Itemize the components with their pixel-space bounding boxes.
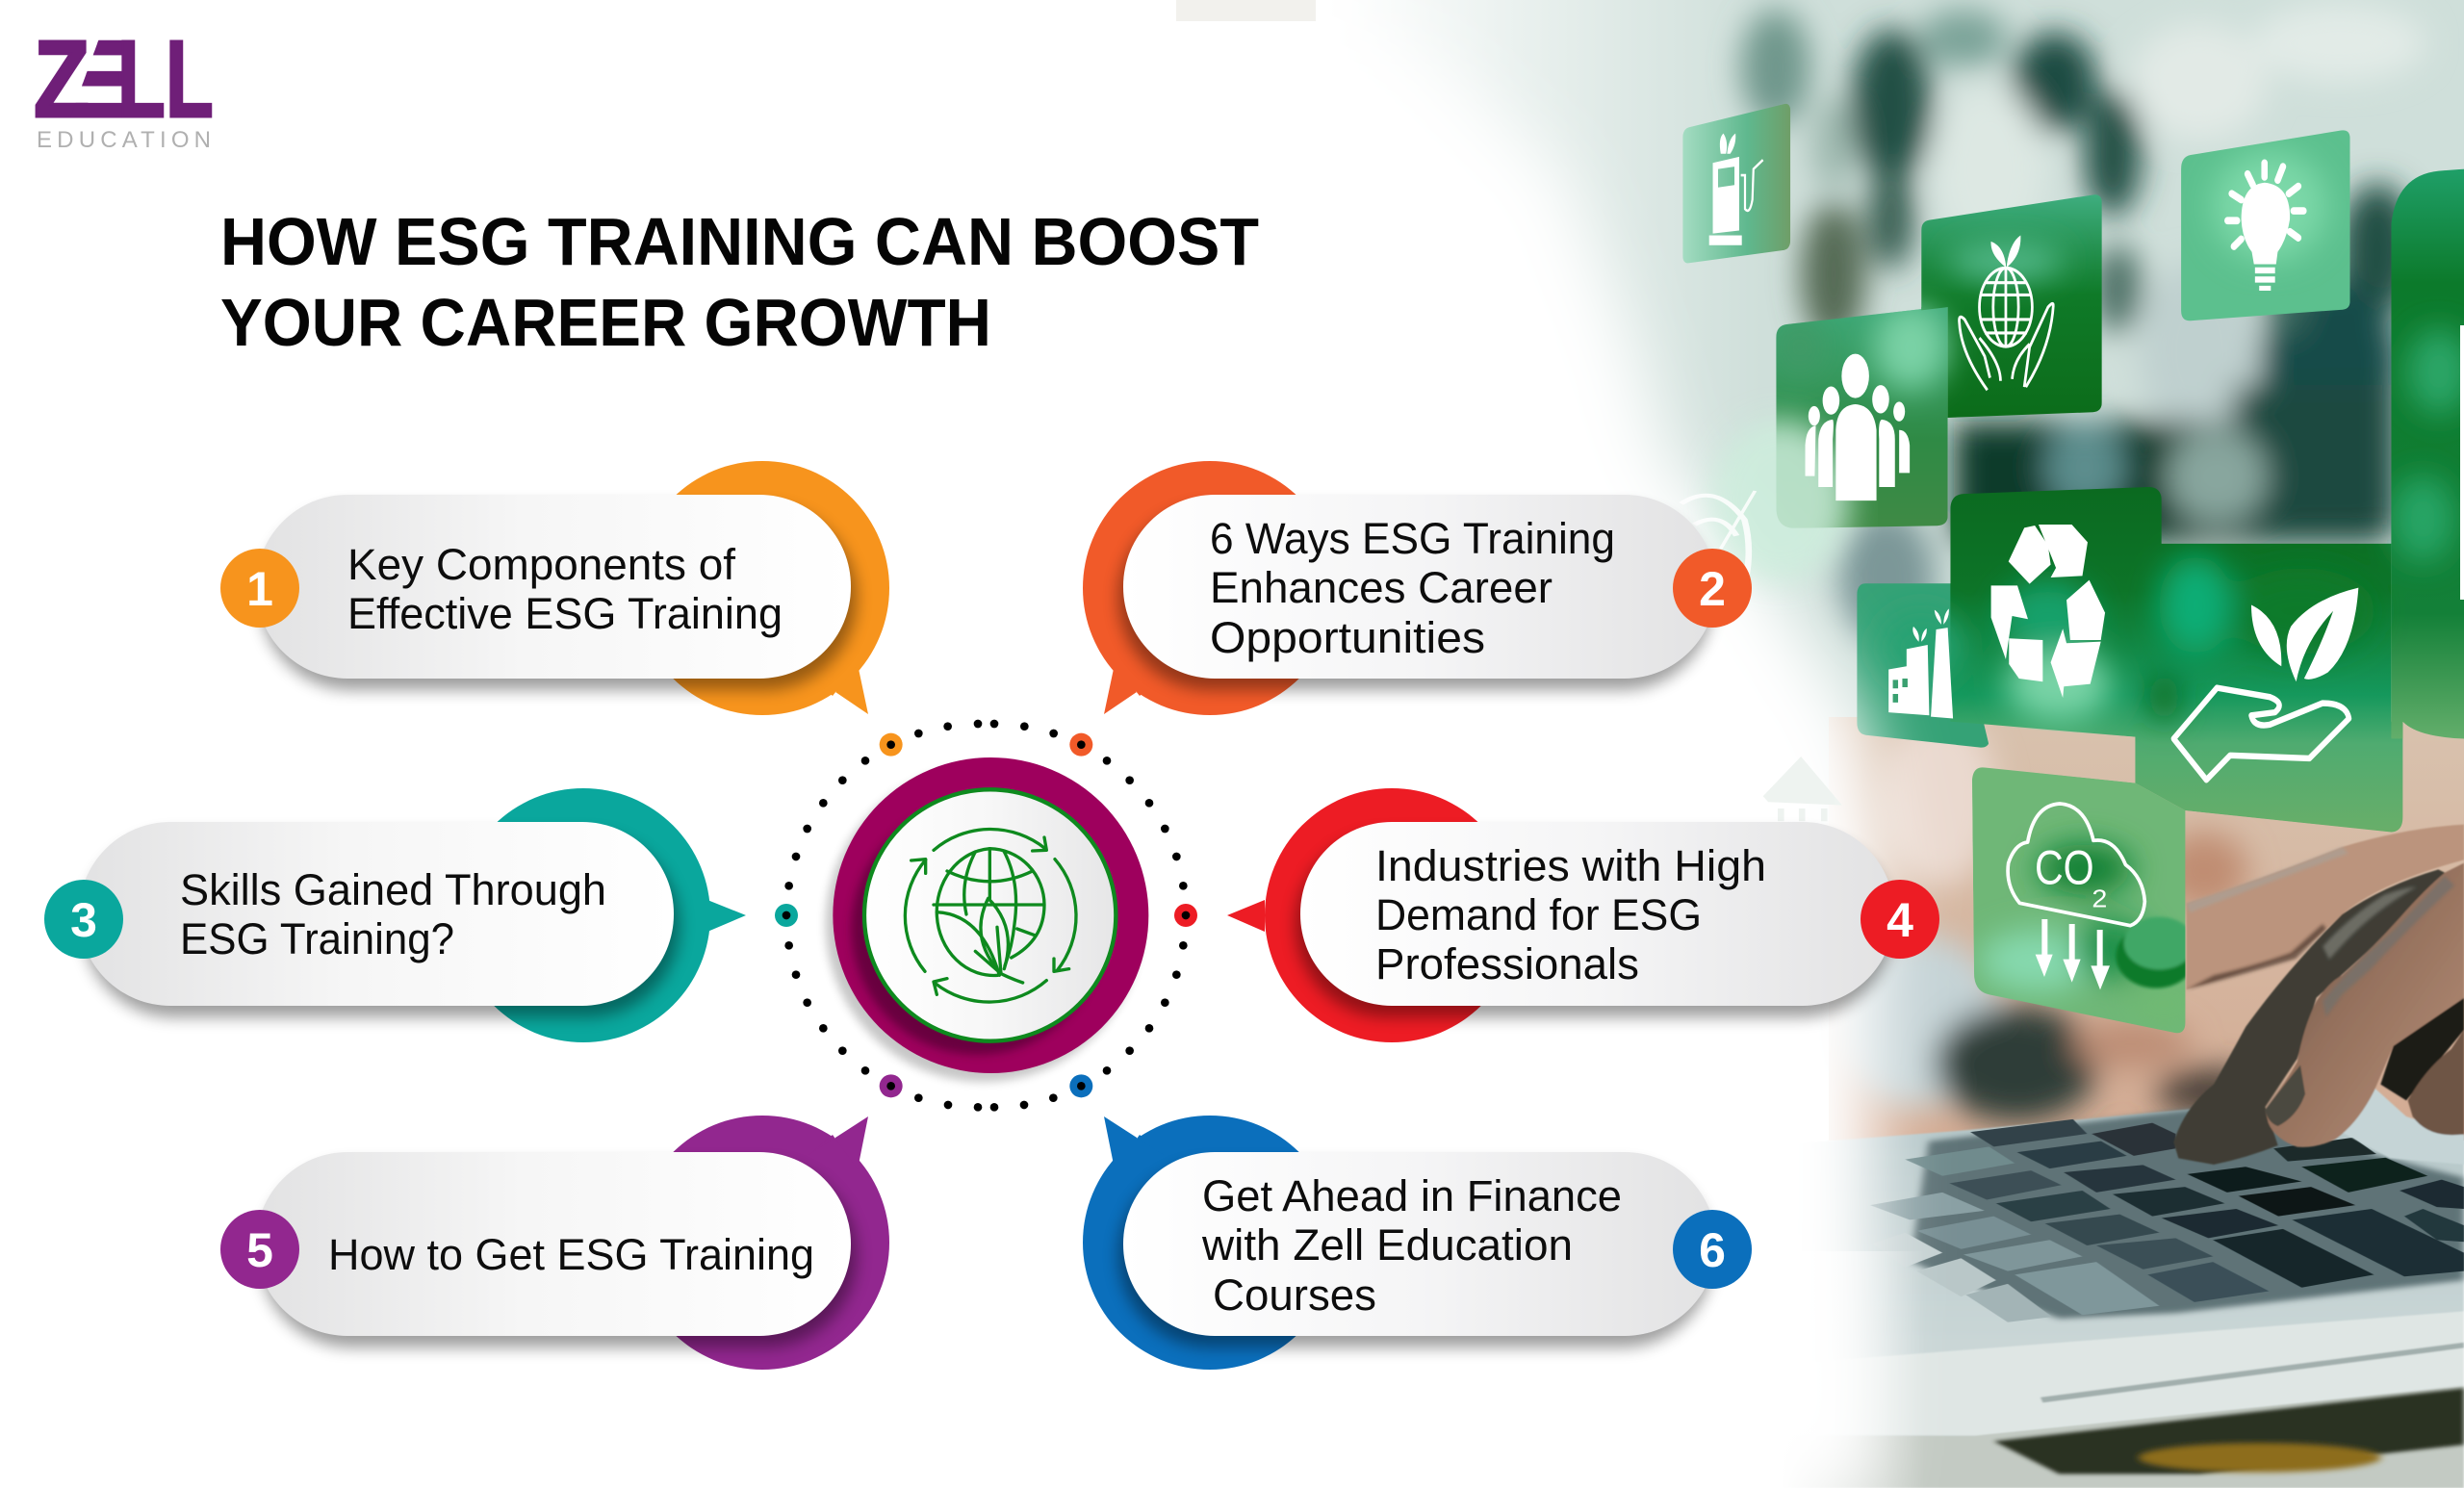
panel: item 5: 5 — [246, 1223, 273, 1277]
logo: Zell Education: Z — [34, 19, 90, 141]
icon: factory — [1888, 608, 1953, 719]
photo: pale beige corner strip — [1176, 0, 1316, 21]
panel: item 6: with Zell Education — [1201, 1220, 1573, 1270]
icon: people group — [1806, 354, 1910, 500]
photo: pale green haze — [1711, 419, 1850, 582]
logo: Zell Education: L — [166, 18, 214, 140]
photo: bottom edge fade — [1781, 1251, 1925, 1488]
panel: item 2 — [1083, 461, 1752, 715]
panel: item 1: Key Components of — [347, 540, 735, 589]
photo: finger seen through CO2 tile — [2116, 917, 2196, 988]
icon: light bulb — [2227, 163, 2303, 291]
panel: item 4: 4 — [1886, 893, 1913, 947]
logo: Zell Education: L — [117, 18, 166, 140]
photo: green translucent tiles — [1682, 102, 2464, 1036]
photo: laptop body — [1732, 1108, 2464, 1488]
panel: item 2: 6 Ways ESG Training — [1210, 514, 1615, 563]
icon: target, faded — [1681, 491, 1755, 603]
white inner disc — [864, 789, 1116, 1041]
title: YOUR CAREER GROWTH — [220, 285, 991, 360]
panel: item 6 — [1083, 1116, 1752, 1370]
photo: white fade into page — [0, 0, 1891, 1488]
panel: item 6: Courses — [1213, 1270, 1376, 1320]
panel: item 1 — [220, 461, 889, 715]
panel: item 2: Enhances Career — [1210, 563, 1553, 612]
panel: item 5: How to Get ESG Training — [328, 1230, 814, 1279]
icon: bank, faded — [1763, 757, 1842, 821]
title: HOW ESG TRAINING CAN BOOST — [220, 204, 1259, 279]
photo: white edge sliver — [2460, 325, 2464, 600]
panel: item 3 — [44, 788, 746, 1042]
icon: CO2 cloud with arrows: 2 — [2092, 885, 2107, 913]
photo: keyboard keys — [1870, 1119, 2464, 1322]
dotted ring — [775, 720, 1197, 1112]
icon: CO2 cloud with arrows: CO — [2035, 840, 2094, 894]
panel: item 4: Demand for ESG — [1375, 890, 1702, 939]
photo: warm, pale and shadow tones — [1829, 712, 2272, 1121]
photo: bokeh blobs — [1741, 5, 2426, 645]
panel: item 1: Effective ESG Training — [347, 589, 783, 638]
photo: pale backdrop — [1155, 0, 2464, 866]
title — [220, 204, 1259, 360]
panel: item 2: Opportunities — [1210, 613, 1485, 662]
panel: item 6: 6 — [1699, 1223, 1726, 1277]
icon: recycle arrows — [1991, 525, 2105, 698]
photo: desk and skin background — [1829, 717, 2464, 1141]
panel: item 3: ESG Training? — [180, 914, 454, 963]
center hub with dotted ring — [775, 720, 1197, 1112]
icon: globe, leaf and cycle arrows — [905, 830, 1076, 1002]
panel: item 2: 2 — [1699, 562, 1726, 616]
logo: Zell Education: EDUCATION — [37, 127, 211, 153]
panel: item 4: Professionals — [1375, 939, 1639, 988]
panel: item 6: Get Ahead in Finance — [1202, 1171, 1622, 1220]
icon: globe held in hands — [1960, 236, 2053, 390]
panel: item 3: 3 — [70, 893, 97, 947]
purple outer disc — [826, 757, 1148, 1082]
panel: item 5 — [220, 1116, 889, 1370]
photo: hand — [2173, 825, 2464, 1165]
panel: item 1: 1 — [246, 562, 273, 616]
icon: fuel pump — [1709, 134, 1763, 245]
panel: item 4: Industries with High — [1375, 841, 1766, 890]
panel: item 3: Skills Gained Through — [180, 865, 606, 914]
panel: item 4 — [1227, 788, 1939, 1042]
logo: Zell Education: E — [42, 18, 133, 141]
icon: hand holding leaves — [2173, 588, 2358, 780]
logo: Zell Education — [35, 40, 212, 147]
icon: CO2 cloud with arrows — [2008, 804, 2144, 989]
photo: solid white left margin — [0, 0, 1781, 1488]
